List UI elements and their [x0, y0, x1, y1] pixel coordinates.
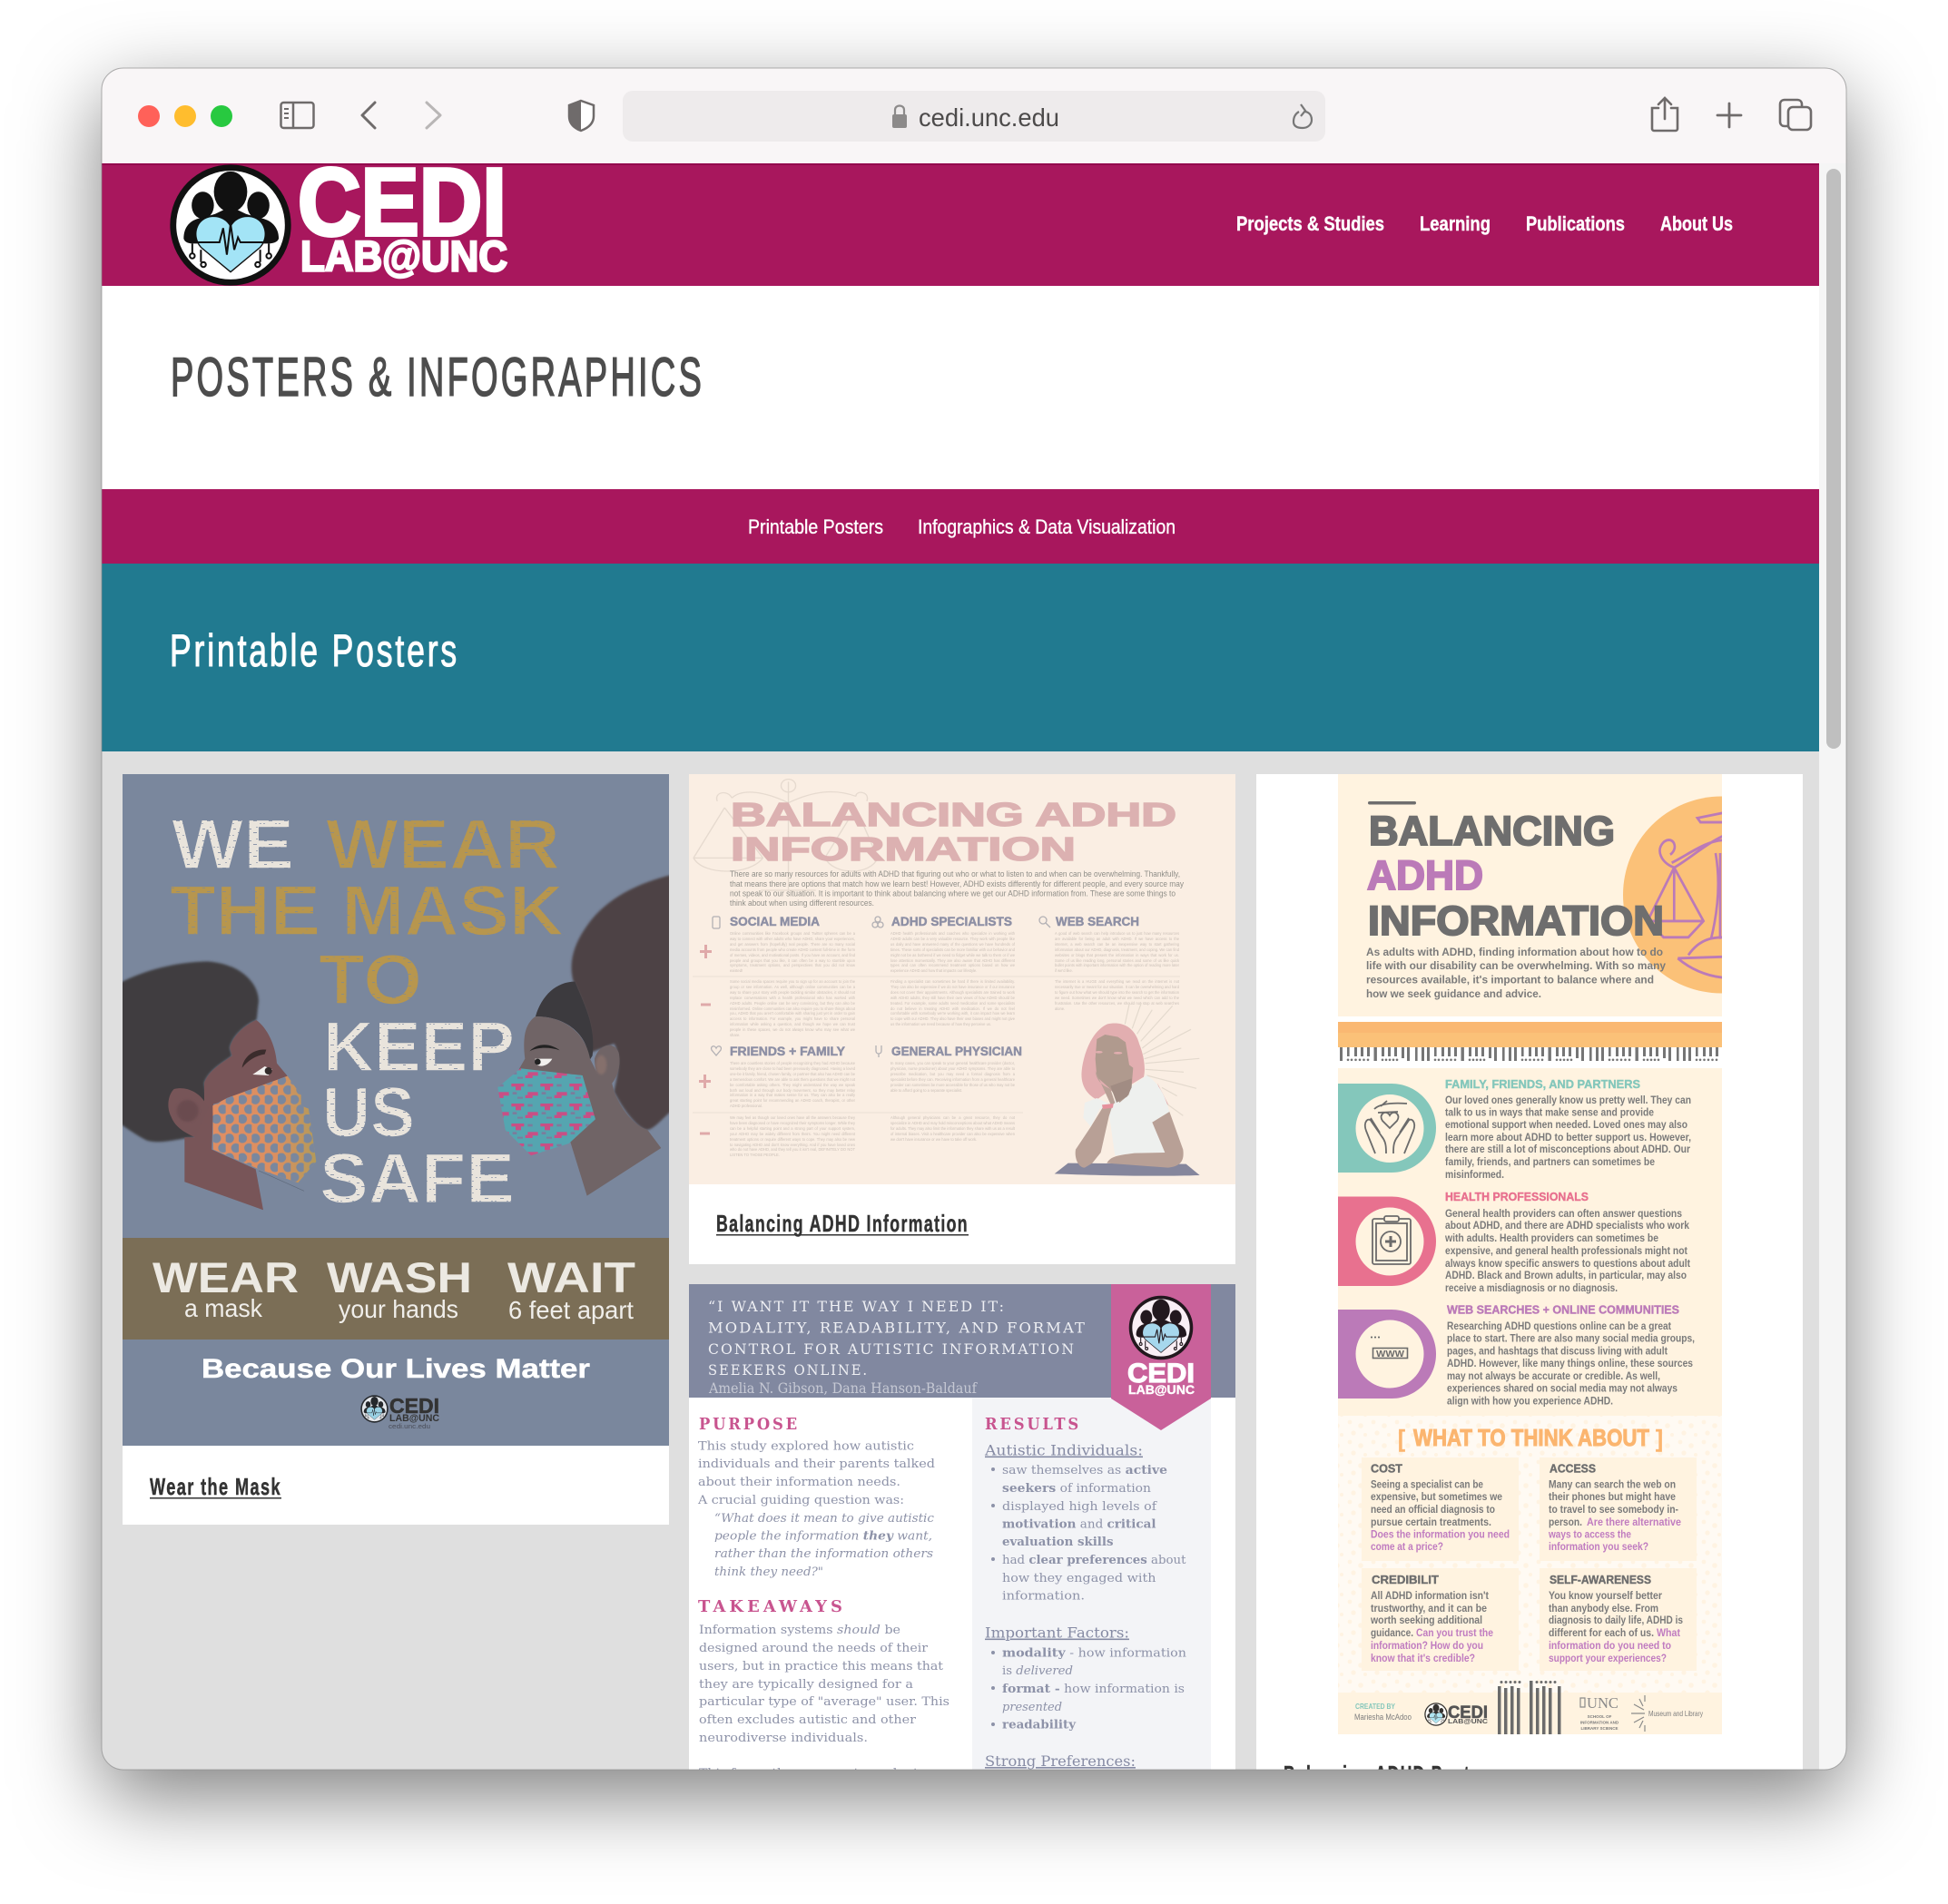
ribbon with logo	[1111, 1284, 1211, 1430]
item: health professionals: with adults. Health providers can sometimes be	[1444, 1232, 1658, 1244]
poster header band	[689, 1284, 1235, 1398]
poster: Wear the Mask	[113, 774, 681, 1446]
icon: www window	[1371, 1338, 1407, 1359]
headline: TO	[319, 939, 422, 1019]
main navigation: About Us	[1660, 212, 1733, 235]
intro paragraph	[730, 869, 1184, 908]
column body text: The internet is a HUGE and everything we read on the internet is not necessarily true or meant for our situation. It can be overwhelming and hard to figure out how what we should type into the search to get the information we need. Sometimes we don't know what we need which can add to the frustration. Use the other resources, we should not stop at web searches alone.	[1055, 979, 1179, 1011]
purpose section: individuals and their parents talked	[698, 1457, 935, 1471]
column body text: Online communities like Facebook groups and Twitter spheres can be a way to connect with other adults who have ADHD, share your experiences, and get answers from (hopefully) real people. There are so many social media accounts from people who create ADHD content full-time in the form of memes, videos, and motivational posts. If you have an account, and find people and groups that you like, it can often be a way to stumble upon symptoms, treatment options, and perspectives that you did not know existed!	[730, 931, 855, 973]
box: access: their phones but might have	[1549, 1490, 1676, 1503]
box: cost: come at a price?	[1371, 1540, 1443, 1553]
takeaways section: designed around the needs of their	[699, 1642, 929, 1655]
takeaways section: Information systems should be	[699, 1624, 900, 1637]
takeaways section	[698, 1598, 949, 1781]
section banner	[102, 564, 1819, 751]
box: self-awareness: different for each of us.	[1549, 1626, 1654, 1639]
box: self-awareness: What	[1657, 1626, 1680, 1639]
box: cost: expensive, but sometimes we	[1371, 1490, 1502, 1503]
poster title: BALANCING ADHD	[731, 796, 1176, 833]
main navigation	[1237, 216, 1732, 235]
item: family, friends, partners: Our loved ones generally know us pretty well. They can	[1445, 1094, 1691, 1106]
dividers	[693, 977, 1180, 1113]
column body text: In many cases, you can speak to your general healthcare provider (doctor, physician, nurse practioner) about your ADHD symptoms. They are able to prescribe medication, but you may need a formal diagnosis from a specialist before they can. Receiving information from a general healthcare provider can sometimes be more accessible for those of us who may not be able to afford going to a separate specialist.	[890, 1061, 1015, 1093]
results section: evaluation skills	[1002, 1535, 1113, 1549]
results section: how they engaged with	[1002, 1572, 1156, 1585]
item: health professionals	[1338, 1190, 1690, 1294]
headline	[170, 804, 564, 1218]
results section: presented	[1002, 1701, 1062, 1714]
item: web searches: experiences shared on social media may not always	[1447, 1381, 1677, 1394]
icon: tabs	[1780, 100, 1811, 130]
box: self-awareness: SELF-AWARENESS	[1550, 1573, 1651, 1586]
item: family, friends, partners: family, friends, and partners can sometimes be	[1445, 1155, 1655, 1168]
decorative bands	[1338, 1022, 1722, 1062]
band: wear wash wait: WEAR	[152, 1253, 299, 1301]
column headings: GENERAL PHYSICIAN	[891, 1045, 1022, 1058]
logo: CEDI Lab@UNC: LAB@UNC	[300, 232, 507, 280]
headline: US	[322, 1072, 415, 1152]
purpose section: think they need?"	[714, 1565, 823, 1579]
item: family, friends, partners: learn more about ADHD to better support us. However,	[1445, 1131, 1691, 1143]
browser toolbar	[102, 68, 1846, 163]
takeaways section: users, but in practice this means that	[699, 1660, 944, 1673]
what to think about section	[1338, 1416, 1722, 1693]
box: cost: pursue certain treatments.	[1371, 1516, 1491, 1528]
band: wear wash wait: a mask	[184, 1294, 263, 1322]
vertical barcode	[1498, 1681, 1561, 1734]
purpose section: “What does it mean to give autistic	[714, 1512, 934, 1526]
results section: seekers of information	[1002, 1481, 1151, 1496]
slogan: Because Our Lives Matter	[202, 1354, 590, 1384]
item: health professionals: expensive, and general health professionals might not	[1445, 1244, 1687, 1257]
column headings	[730, 915, 1139, 1058]
icon: lock	[892, 105, 907, 128]
poster header: INFORMATION	[1368, 898, 1664, 944]
band: wear wash wait: WASH	[327, 1253, 472, 1301]
takeaways section: This forms the purpose to evaluate	[699, 1767, 926, 1781]
box: cost: COST	[1371, 1461, 1402, 1476]
box: access	[1540, 1457, 1697, 1561]
poster header band: CONTROL FOR AUTISTIC INFORMATION	[708, 1341, 1076, 1358]
purpose section: people the information they want,	[714, 1528, 932, 1543]
main navigation: Learning	[1420, 212, 1491, 235]
box: credibility: know that it's credible?	[1371, 1652, 1475, 1664]
url text: cedi.unc.edu	[919, 103, 1059, 132]
illustration: orange circle and scales	[1623, 797, 1820, 993]
icon: reload	[1294, 104, 1312, 128]
intro paragraph: There are so many resources for adults with ADHD that figuring out who or what to listen to and when can be overwhelming. Thankfully,	[730, 869, 1180, 879]
item: health professionals: General health providers can often answer questions	[1445, 1207, 1682, 1220]
window buttons	[138, 105, 232, 127]
caption link: Wear the Mask	[150, 1473, 281, 1500]
box: access: ways to access the	[1548, 1528, 1631, 1541]
poster title	[731, 796, 1176, 868]
results section: is delivered	[1002, 1664, 1073, 1678]
column body text: A good of web search can help introduce us to just how many resources are available for being an adult with ADHD. If we have access to the internet, a web search can be an inexpensive way to start gathering information about our ADHD, diagnosis, treatment, and coping. We can find websites or blogs that present the information in ways that work for us. Some of us like reading long, personal stories and some of us like quick bullet points with important information with the option of reading more later if we'd like.	[1055, 931, 1179, 973]
box: credibility: guidance.	[1371, 1626, 1413, 1639]
column body text: We may feel as though our loved ones have all the answers because they have been diagnosed or have recognized their symptoms longer. While they can be a helpful starting point and a strong part of your support system, your ADHD may be widely different from theirs. You might need different treatment options or require different ways to cope. They may also be new to navigating ADHD and don't know everything. And if you have loved ones who do not have ADHD, and they tell you it isn't real, DEFINITELY DO NOT LISTEN TO THOSE PEOPLE.	[730, 1115, 855, 1157]
UNC SILS logo: LIBRARY SCIENCE	[1580, 1726, 1618, 1731]
card: Balancing ADHD Information	[689, 774, 1235, 1264]
results section: Strong Preferences:	[985, 1752, 1136, 1770]
results section: had clear preferences about	[1002, 1553, 1186, 1567]
intro paragraph: that means there are options that match how we learn best! However, ADHD exists differently for different people, and every source may	[730, 879, 1184, 889]
item: web searches: align with how you experience ADHD.	[1447, 1394, 1613, 1407]
UNC SILS logo	[1580, 1694, 1619, 1731]
title band	[102, 286, 1819, 489]
purpose section: PURPOSE	[699, 1416, 800, 1434]
headline: WEAR	[326, 804, 560, 884]
poster header	[1338, 774, 1820, 1016]
icon: hands and heart	[1365, 1101, 1414, 1153]
item: web searches: ADHD. However, like many things online, these sources	[1447, 1357, 1693, 1369]
box: self-awareness: support your experiences?	[1549, 1652, 1667, 1664]
small CEDI logo: LAB@UNC	[389, 1413, 439, 1424]
results section: displayed high levels of	[1002, 1500, 1157, 1514]
sub navigation: Infographics & Data Visualization	[918, 515, 1176, 538]
results section: Important Factors:	[985, 1624, 1129, 1641]
box: self-awareness: information do you need to	[1549, 1639, 1671, 1652]
CEDI logo	[1424, 1703, 1488, 1726]
ribbon with logo: LAB@UNC	[1128, 1383, 1195, 1397]
poster header band: SEEKERS ONLINE.	[708, 1362, 869, 1379]
small CEDI logo	[360, 1394, 439, 1430]
item: web searches: Researching ADHD questions online can be a great	[1447, 1320, 1671, 1332]
caption link: Balancing ADHD Poster	[1284, 1761, 1488, 1788]
sub navigation	[102, 489, 1819, 564]
icon: new tab	[1717, 103, 1741, 127]
box: cost: need an official diagnosis to	[1371, 1503, 1495, 1516]
band: wear wash wait: 6 feet apart	[508, 1296, 634, 1324]
column body text: ADHD health professionals and coaches who specialize in working with ADHD adults can be a very valuable resource. They work with people like us daily and have answered many of the questions we have hundreds of times. These sorts of specialists can be more familiar with our behavior and might not be as bothered if we need to fidget while we talk to them or if we lose attention momentarily. They are also aware that ADHD has different types and can often recommend treatment options based on how we experience ADHD and how that impacts our lifestyle.	[890, 931, 1015, 973]
item: health professionals: about ADHD, and there are ADHD specialists who work	[1445, 1219, 1689, 1232]
plus and minus markers	[699, 945, 712, 1134]
intro paragraph: not speak to our situation. It is important to think about balancing where we get our ADHD information from. These are some things to	[730, 889, 1176, 898]
box: self-awareness: You know yourself better	[1549, 1589, 1662, 1602]
purpose section: about their information needs.	[698, 1476, 900, 1489]
resource list	[1338, 1068, 1722, 1416]
icon: clipboard with cross	[1372, 1216, 1411, 1264]
CEDI logo: LAB@UNC	[1448, 1719, 1488, 1725]
poster footer: Mariesha McAdoo	[1354, 1713, 1412, 1722]
UNC SILS logo: UNC	[1587, 1694, 1618, 1712]
takeaways section: particular type of "average" user. This	[699, 1695, 949, 1709]
credit: CREATED BY	[1355, 1702, 1395, 1711]
item: family, friends, partners: FAMILY, FRIENDS, AND PARTNERS	[1445, 1077, 1640, 1091]
illustration: man in hexagon mask	[113, 961, 316, 1210]
card: Balancing ADHD Poster	[1256, 774, 1820, 1788]
box: self-awareness: diagnosis to daily life, ADHD is	[1549, 1614, 1683, 1626]
box: access: ACCESS	[1550, 1461, 1596, 1476]
page title: POSTERS & INFOGRAPHICS	[171, 347, 704, 407]
item: health professionals: ADHD. Black and Brown adults, in particular, may also	[1445, 1269, 1687, 1281]
item: family, friends, partners: misinformed.	[1445, 1168, 1504, 1181]
column body text: There are countless stories of people recognizing they had ADHD because somebody they are close to had been previously diagnosed. Having a loved one-be it family, friend, chosen family, or partner-that also has ADHD can be a tremendous comfort. We are able to ask them questions that we might not be comfortable asking others. They might understand the way we speak both out loud and through our body movement, so they may better relay information in a way that makes sense for us. They can also be a really great starting point for recommending an ADHD coach, therapist, or other ADHD professional.	[730, 1061, 855, 1108]
main navigation: Projects & Studies	[1236, 212, 1384, 235]
column icons	[712, 917, 1050, 1057]
results section: modality - how information	[1002, 1646, 1186, 1661]
card: autistic information seekers poster	[689, 1284, 1235, 1781]
headline: THE MASK	[170, 870, 564, 950]
intro paragraph: resources available, it's important to balance where and	[1366, 973, 1654, 986]
item: web searches: WEB SEARCHES + ONLINE COMMUNITIES	[1447, 1303, 1679, 1316]
takeaways section: neurodiverse individuals.	[699, 1732, 868, 1745]
logo: CEDI Lab@UNC	[170, 164, 508, 286]
box: credibility: information? How do you	[1371, 1639, 1483, 1652]
IMLS logo: Museum and Library	[1648, 1709, 1704, 1718]
authors: Amelia N. Gibson, Dana Hanson-Baldauf	[708, 1380, 978, 1397]
results section: readability	[1002, 1717, 1077, 1732]
item: family, friends, partners	[1338, 1077, 1691, 1181]
poster header: BALANCING	[1369, 808, 1615, 854]
poster header band: MODALITY, READABILITY, AND FORMAT	[708, 1320, 1087, 1336]
column body text: Although general physicians can be a great resource, they do not specialize in ADHD and may hold misconceptions about what ADHD means for adults. They may also limit the information they share with us as a result of internal biases. Visit a healthcare provider can also be expensive when we don't have insurance or we have to take off work.	[890, 1115, 1015, 1142]
item: web searches: pages, and hashtags that discuss living with adult	[1447, 1345, 1668, 1358]
illustration: woman thinking	[1055, 1003, 1200, 1176]
results section: RESULTS	[985, 1416, 1081, 1434]
results section: format - how information is	[1002, 1682, 1185, 1696]
intro paragraph: life with our disability can be overwhelming. With so many	[1366, 959, 1666, 972]
box: cost	[1362, 1457, 1519, 1561]
purpose section: A crucial guiding question was:	[697, 1494, 904, 1507]
box: access: information you seek?	[1549, 1540, 1648, 1553]
item: web searches	[1338, 1303, 1695, 1407]
item: health professionals: HEALTH PROFESSIONALS	[1445, 1190, 1589, 1203]
box: credibility: All ADHD information isn't	[1371, 1589, 1489, 1602]
logo: CEDI Lab@UNC: CEDI	[298, 149, 507, 256]
poster title	[1368, 801, 1416, 804]
small CEDI logo: CEDI	[389, 1394, 439, 1418]
section heading: WHAT TO THINK ABOUT	[1413, 1424, 1649, 1451]
CEDI logo: CEDI	[1448, 1703, 1488, 1722]
icon: www window: WWW	[1376, 1349, 1405, 1359]
poster header band: “I WANT IT THE WAY I NEED IT:	[708, 1299, 1006, 1315]
UNC SILS logo: INFORMATION AND	[1580, 1721, 1619, 1724]
results section	[984, 1416, 1186, 1770]
column headings: WEB SEARCH	[1056, 915, 1139, 928]
item: web searches: place to start. There are also many social media groups,	[1447, 1332, 1695, 1345]
box: credibility	[1362, 1568, 1519, 1671]
takeaways section: they are typically designed for a	[699, 1678, 913, 1692]
icon: back and forward arrows	[362, 103, 440, 128]
headline: WE	[172, 804, 294, 884]
poster header: ADHD	[1367, 852, 1483, 898]
purpose section	[697, 1416, 935, 1579]
box: cost: Seeing a specialist can be	[1371, 1477, 1483, 1490]
caption link: Balancing ADHD Information	[716, 1210, 969, 1237]
intro paragraph: As adults with ADHD, finding information about how to do	[1366, 946, 1663, 958]
purpose section: This study explored how autistic	[698, 1439, 914, 1454]
illustration: woman in patterned mask	[497, 873, 681, 1196]
watermark scales	[694, 780, 878, 892]
section heading: Printable Posters	[170, 625, 459, 676]
section heading: [	[1398, 1425, 1405, 1452]
band: wear wash wait: your hands	[339, 1295, 458, 1323]
box: self-awareness: than anybody else. From	[1549, 1602, 1658, 1614]
item: health professionals: always know specific answers to questions about adult	[1445, 1257, 1690, 1270]
results section: motivation and critical	[1002, 1517, 1156, 1532]
box: credibility: trustworthy, and it can be	[1371, 1602, 1487, 1614]
column body text	[730, 931, 1179, 1161]
item: web searches: may not always be accurate or credible. As well,	[1447, 1369, 1660, 1382]
poster footer	[1338, 1681, 1722, 1734]
column body text: Some social media spaces require you to sign up for an account to join the group or see information. As well, although online communities can be a way to share your story with people tackling similar obstacles, it should not replace conversations with a health professional who has worked with ADHD adults. People online can be very convincing, but they can also be misinformed. Online communities can also require you to share things about you, ADHD that you aren't comfortable with sharing just yet in order to gain access to information. For example, you might have to share personal information while asking a question, and though we hope we can trust people in these spaces, we do not always know who may see what we share.	[730, 979, 855, 1037]
scrollbar	[1819, 163, 1846, 1770]
purpose section: rather than the information others	[714, 1547, 933, 1561]
main navigation: Publications	[1526, 212, 1625, 235]
headline: KEEP	[323, 1006, 515, 1086]
intro paragraph: how we seek guidance and advice.	[1366, 987, 1541, 1000]
intro paragraph	[1366, 946, 1666, 1000]
box: credibility: CREDIBILIT	[1372, 1573, 1439, 1586]
icon: share	[1652, 98, 1677, 131]
box: access: Many can search the web on	[1549, 1477, 1676, 1490]
section heading: ]	[1656, 1425, 1663, 1452]
band: wear wash wait	[123, 1238, 669, 1340]
box: access: Are there alternative	[1587, 1516, 1681, 1528]
box: access: to travel to see somebody in-	[1549, 1503, 1678, 1516]
icon: sidebar	[281, 103, 314, 128]
takeaways section: TAKEAWAYS	[698, 1598, 846, 1616]
small CEDI logo: cedi.unc.edu	[389, 1424, 430, 1430]
address bar	[623, 91, 1325, 142]
takeaways section: often excludes autistic and other	[699, 1713, 917, 1727]
icon: privacy shield	[569, 101, 594, 131]
item: family, friends, partners: talk to us in ways that make sense and provide	[1445, 1105, 1654, 1118]
item: family, friends, partners: there are still a lot of misconceptions about ADHD. Our	[1445, 1143, 1690, 1155]
results section: information.	[1002, 1590, 1085, 1603]
header bar	[102, 163, 1819, 286]
column headings: FRIENDS + FAMILY	[730, 1045, 845, 1058]
results column background	[972, 1398, 1211, 1774]
column headings: ADHD SPECIALISTS	[891, 915, 1012, 928]
poster title: INFORMATION	[731, 830, 1076, 868]
sub navigation: Printable Posters	[748, 515, 883, 538]
IMLS logo	[1631, 1695, 1704, 1732]
box: cost: Does the information you need	[1371, 1528, 1510, 1541]
box: access: person.	[1549, 1516, 1582, 1528]
band: wear wash wait: WAIT	[507, 1253, 635, 1301]
box: credibility: Can you trust the	[1416, 1626, 1493, 1639]
UNC SILS logo: SCHOOL OF	[1588, 1714, 1612, 1719]
poster: Balancing ADHD Information	[689, 774, 1235, 1184]
results section: Autistic Individuals:	[984, 1441, 1143, 1459]
column headings: SOCIAL MEDIA	[730, 915, 820, 928]
card: Wear the Mask	[113, 774, 681, 1525]
item: family, friends, partners: emotional support when needed. Loved ones may also	[1445, 1118, 1687, 1131]
box: self-awareness	[1540, 1568, 1697, 1671]
ribbon with logo: CEDI	[1127, 1359, 1195, 1389]
intro paragraph: think about when using different resources.	[730, 898, 874, 908]
results section: saw themselves as active	[1002, 1463, 1167, 1477]
item: health professionals: receive a misdiagnosis or no diagnosis.	[1445, 1281, 1618, 1294]
box: credibility: worth seeking additional	[1370, 1614, 1482, 1626]
column body text: Finding a specialist can sometimes be hard if there is limited availability. They can also be expensive if we do not have insurance or if our insurance does not cover their appointments. Although specialists are trained to work with ADHD adults, they still have their own views of how ADHD should be treated. For example, some adults need medication and some specialists do not believe in treating ADHD with medication. If we do not feel comfortable with somebody we're working with, it can impact how we learn to cope with our ADHD. They also have their own biases and might not give us the information we need because of how they perceive us.	[890, 979, 1015, 1026]
headline: SAFE	[320, 1138, 515, 1218]
